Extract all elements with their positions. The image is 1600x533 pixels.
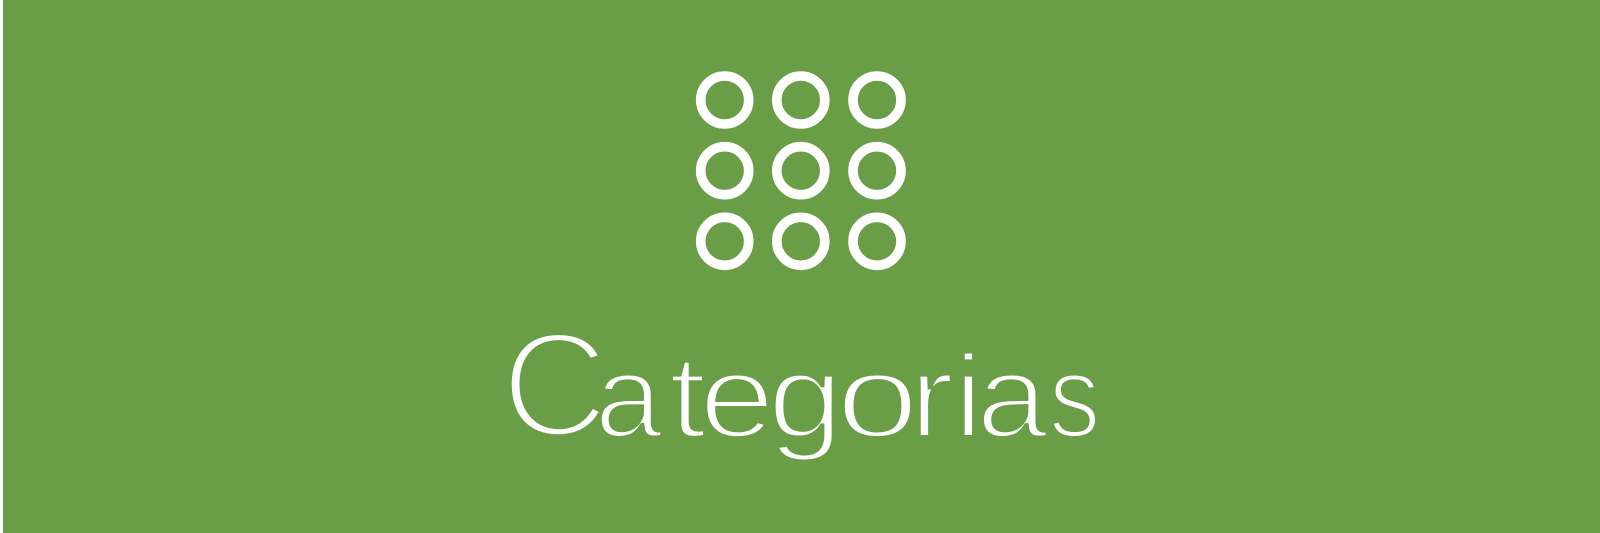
icon: grid of nine rings	[701, 76, 901, 265]
title: Categorias: teg	[669, 330, 843, 462]
title: Categorias: a	[976, 330, 1048, 462]
title: Categorias: a	[595, 330, 663, 462]
title: Categorias: s	[1049, 330, 1101, 462]
title: Categorias: C	[501, 301, 609, 468]
title: Categorias: ri	[909, 330, 983, 462]
title: Categorias: o	[836, 330, 919, 462]
title: Categorias	[501, 301, 1101, 468]
